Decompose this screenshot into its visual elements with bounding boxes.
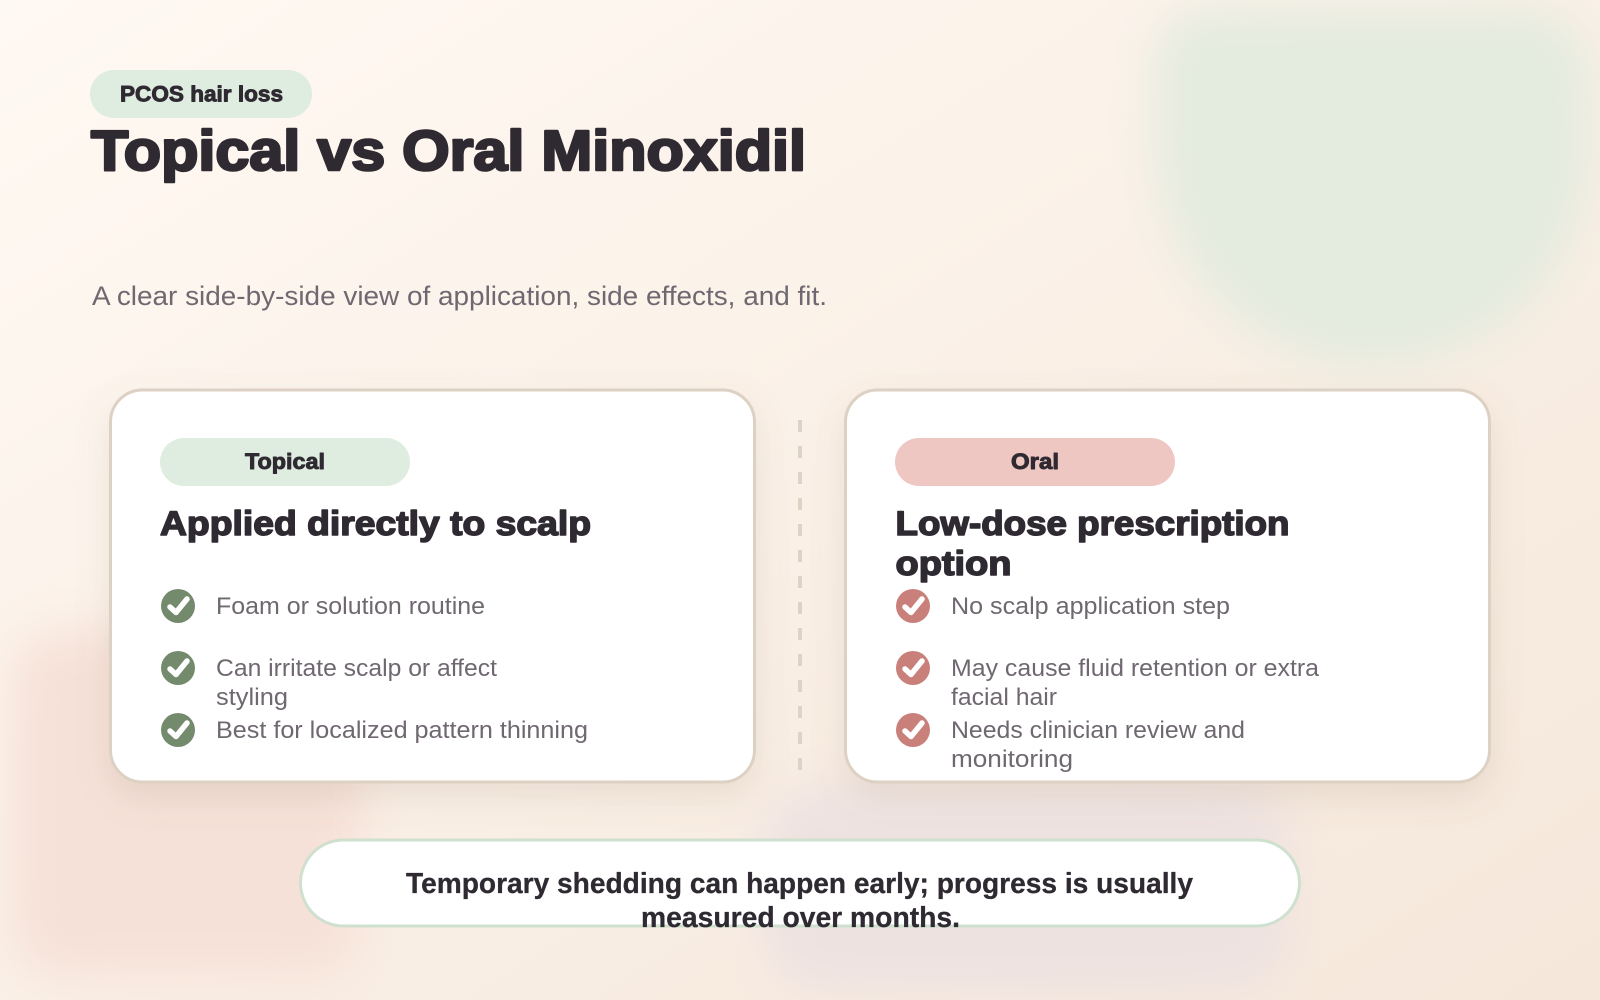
list item: clinician review: [896, 713, 1245, 773]
heading: oral: [896, 505, 1290, 583]
divider: [798, 420, 802, 772]
callout: Temporary shedding can happen early; progress is usually: [406, 868, 1193, 900]
list item: irritation: styling: [216, 684, 288, 711]
heading: oral: Low-dose prescription: [896, 505, 1290, 543]
list item: foam: [161, 589, 485, 623]
callout: [300, 840, 1300, 934]
title: Topical vs Oral Minoxidil: [91, 119, 806, 183]
blob: green: [1155, 8, 1590, 368]
badge: topical: Topical: [245, 449, 325, 474]
list item: irritation: [161, 651, 497, 711]
list item: best for: Best for localized pattern thinning: [216, 717, 588, 744]
panel: topical: [110, 390, 754, 782]
eyebrow pill: PCOS hair loss: [120, 82, 283, 106]
list item: no scalp step: [896, 589, 1230, 623]
blob: lavender: [762, 785, 1292, 993]
heading: topical: Applied directly to scalp: [160, 505, 591, 543]
list item: fluid retention: May cause fluid retention or extra: [951, 655, 1320, 682]
list item: clinician review: monitoring: [951, 746, 1073, 773]
heading: oral: option: [896, 545, 1012, 583]
list item: fluid retention: [896, 651, 1320, 711]
list item: foam: Foam or solution routine: [216, 593, 485, 620]
blob: pink: [12, 630, 362, 978]
badge: topical: [160, 438, 410, 486]
badge: oral: Oral: [1011, 449, 1059, 474]
panel: oral: [846, 390, 1490, 782]
list item: best for: [161, 713, 588, 747]
list item: no scalp step: No scalp application step: [951, 593, 1230, 620]
list item: irritation: Can irritate scalp or affect: [216, 655, 497, 682]
subtitle: A clear side-by-side view of application, side effects, and fit.: [92, 281, 827, 311]
badge: oral: [895, 438, 1175, 486]
list item: clinician review: Needs clinician review and: [951, 717, 1245, 744]
eyebrow pill: [90, 70, 312, 118]
callout: measured over months.: [641, 902, 960, 934]
list item: fluid retention: facial hair: [951, 684, 1057, 711]
